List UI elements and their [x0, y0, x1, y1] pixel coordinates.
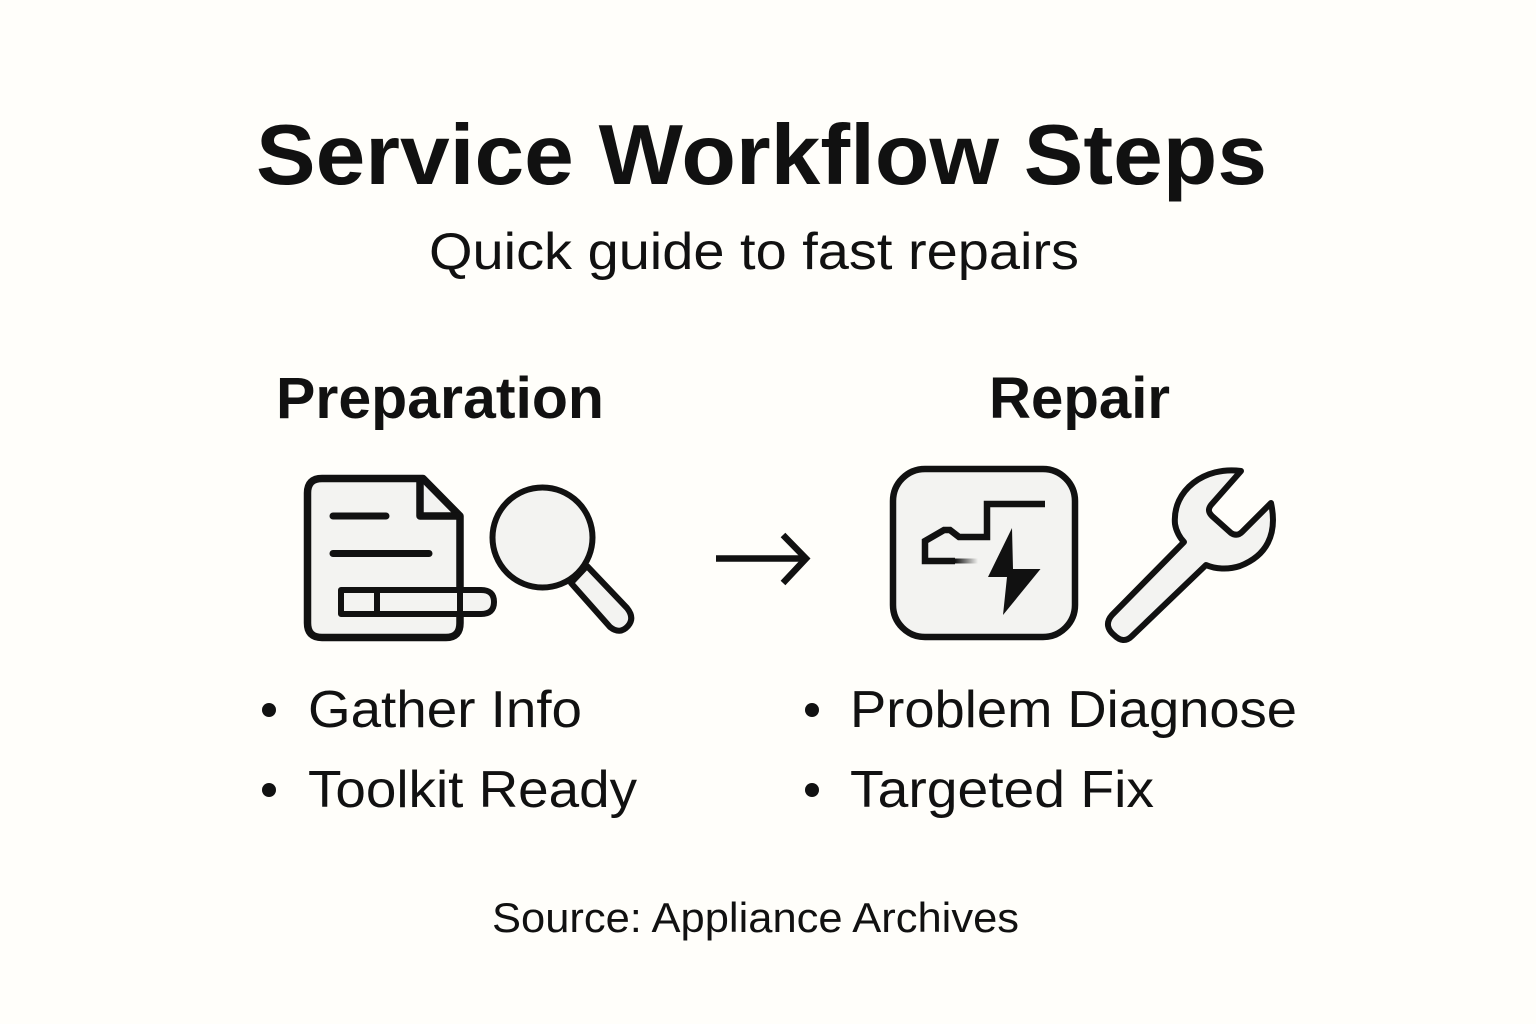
heading: repair: Repair [989, 366, 1170, 431]
source note: Source: Appliance Archives [492, 894, 1019, 941]
icon: electrical panel with bolt [893, 469, 1075, 637]
bullet list: repair: Targeted Fix [850, 761, 1154, 819]
icon: document with pencil bar [308, 478, 494, 638]
bullet list: repair: Problem Diagnose [850, 681, 1297, 739]
bullet list: preparation: Gather Info [308, 681, 582, 739]
bullet list: preparation [262, 681, 637, 819]
arrow [716, 535, 806, 583]
title: Service Workflow Steps [256, 108, 1267, 203]
icon: magnifying glass [492, 488, 631, 631]
heading: preparation: Preparation [276, 366, 604, 431]
subtitle: Quick guide to fast repairs [429, 223, 1079, 281]
bullet list: preparation: Toolkit Ready [308, 761, 637, 819]
bullet list: repair [805, 681, 1297, 819]
icon: wrench [1108, 470, 1273, 640]
